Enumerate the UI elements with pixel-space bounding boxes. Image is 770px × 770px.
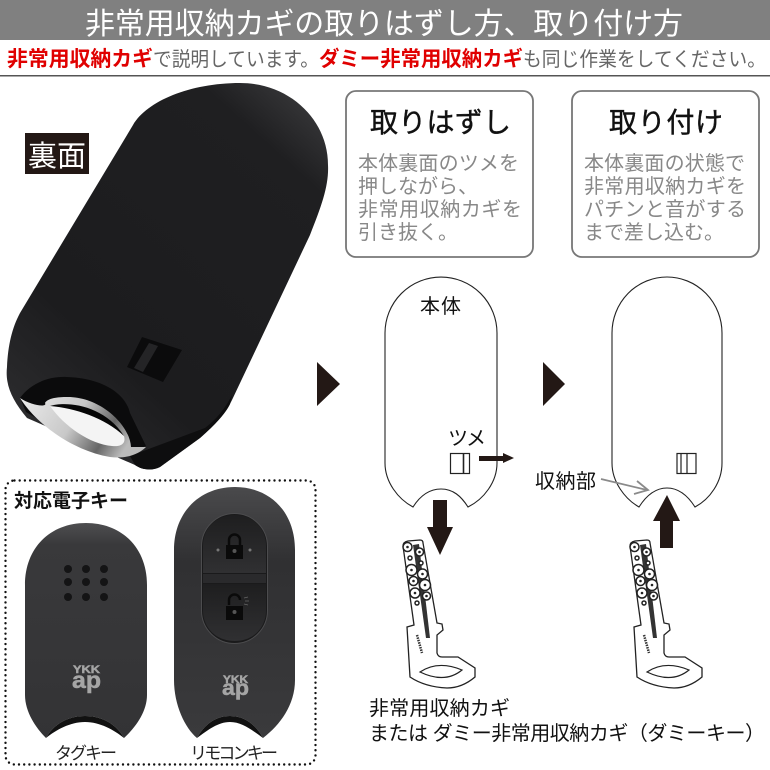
arrow: step 2 bbox=[543, 362, 565, 406]
icon: emergency key, removal bbox=[403, 540, 475, 688]
claw bbox=[450, 454, 470, 474]
label: body: 本体 bbox=[420, 295, 461, 318]
title banner bbox=[0, 0, 770, 41]
notice line: ダミー非常用収納カギ bbox=[319, 47, 523, 71]
unlock icon bbox=[226, 594, 249, 620]
caption: key names: 非常用収納カギ bbox=[369, 697, 510, 720]
body text: 引き抜く。 bbox=[358, 221, 458, 244]
remote key bbox=[174, 487, 295, 738]
logo: YKK bbox=[223, 674, 248, 686]
body text bbox=[584, 152, 746, 244]
logo: YKK bbox=[73, 664, 100, 676]
panel heading: 対応電子キー bbox=[14, 490, 128, 512]
arrow: pull out bbox=[427, 500, 453, 555]
heading: 取り付け bbox=[609, 107, 723, 138]
body text: 非常用収納カギを bbox=[358, 198, 522, 221]
diagram: installation body bbox=[612, 277, 722, 507]
panel: compatible keys bbox=[6, 480, 316, 764]
body text: 本体裏面の状態で bbox=[584, 152, 745, 175]
arrow: push claw bbox=[479, 453, 514, 463]
body text: 本体裏面のツメを bbox=[358, 152, 519, 175]
caption: key names: または ダミー非常用収納カギ（ダミーキー） bbox=[369, 722, 765, 745]
panel: installation bbox=[572, 91, 759, 257]
label: claw: ツメ bbox=[448, 428, 486, 450]
label: storage slot: 収納部 bbox=[535, 470, 596, 493]
body text: 押しながら、 bbox=[358, 175, 478, 198]
heading: 取りはずし bbox=[370, 107, 511, 138]
key slot bbox=[127, 337, 182, 382]
arrow: insert bbox=[653, 495, 680, 548]
tag key bbox=[25, 523, 147, 738]
remote key label: リモコンキー bbox=[190, 744, 278, 763]
notice line: で説明しています。 bbox=[153, 48, 319, 71]
body text bbox=[358, 152, 522, 244]
arrow: storage slot pointer bbox=[601, 479, 648, 494]
arrow: step 1 bbox=[317, 362, 340, 406]
photo: back of key bbox=[7, 83, 328, 469]
logo: ap bbox=[222, 677, 249, 700]
lock icon bbox=[216, 534, 252, 559]
body text: パチンと音がする bbox=[584, 198, 746, 221]
notice line bbox=[7, 47, 766, 71]
tag key label: タグキー bbox=[55, 744, 117, 763]
logo: ap bbox=[72, 667, 101, 693]
diagram: removal body bbox=[385, 277, 497, 507]
notice line: 非常用収納カギ bbox=[7, 48, 153, 71]
metal ring bbox=[20, 397, 146, 458]
icon: emergency key, installation bbox=[630, 540, 702, 688]
title banner: 非常用収納カギの取りはずし方、取り付け方 bbox=[85, 8, 683, 41]
panel: removal bbox=[346, 91, 533, 257]
caption: key names bbox=[369, 697, 765, 745]
body text: まで差し込む。 bbox=[584, 221, 724, 244]
claw bbox=[677, 454, 696, 474]
buttons bbox=[202, 514, 268, 644]
body text: 非常用収納カギを bbox=[584, 175, 746, 198]
label: back side: 裏面 bbox=[28, 140, 86, 173]
